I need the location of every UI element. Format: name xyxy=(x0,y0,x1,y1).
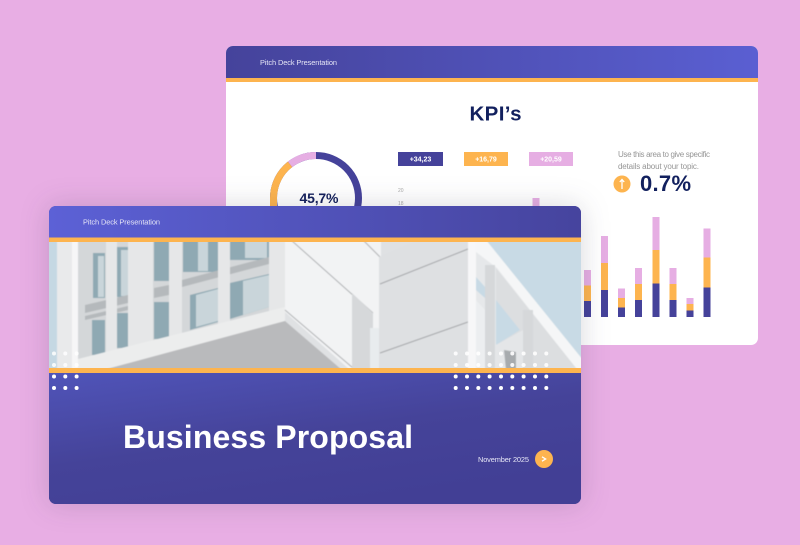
cover header band xyxy=(49,206,581,238)
concrete block xyxy=(379,257,381,368)
date: November 2025 xyxy=(478,455,529,464)
axis labels xyxy=(398,188,404,205)
description text: details about your topic. xyxy=(618,162,699,171)
icon: up arrow xyxy=(614,176,630,192)
soffit xyxy=(103,321,342,370)
dot grid right xyxy=(454,352,548,390)
legend badges xyxy=(398,152,573,166)
dot grid left xyxy=(52,352,79,390)
description text xyxy=(618,150,710,171)
KPI slide header band xyxy=(226,46,758,82)
axis labels: 20 xyxy=(398,188,404,194)
cover lower panel xyxy=(49,373,581,504)
facade columns xyxy=(106,242,285,352)
spandrels xyxy=(85,257,269,320)
window curtains xyxy=(98,240,269,327)
panel: KPI slide xyxy=(226,46,758,345)
description text: Use this area to give specific xyxy=(618,150,710,159)
sky and beam xyxy=(476,240,583,370)
orange strips xyxy=(49,238,581,373)
legend badges: +34,23 xyxy=(410,156,431,164)
icon: next arrow button xyxy=(535,450,553,468)
donut chart: 45,7% xyxy=(300,190,339,206)
white ledge xyxy=(78,307,285,370)
axis labels: 18 xyxy=(398,201,404,207)
cover header band: Pitch Deck Presentation xyxy=(83,218,160,226)
panel: cover slide xyxy=(47,206,583,504)
cover title: Business Proposal xyxy=(123,419,413,455)
donut chart xyxy=(270,152,362,206)
KPI heading: KPI’s xyxy=(470,102,522,126)
stacked bar chart xyxy=(532,198,710,317)
legend badges: +20,59 xyxy=(540,156,562,164)
KPI value: 0.7% xyxy=(640,171,691,196)
building photo xyxy=(47,240,583,370)
windows xyxy=(92,240,269,355)
KPI slide header band: Pitch Deck Presentation xyxy=(260,58,337,67)
legend badges: +16,79 xyxy=(475,156,497,164)
white wall xyxy=(285,240,381,370)
